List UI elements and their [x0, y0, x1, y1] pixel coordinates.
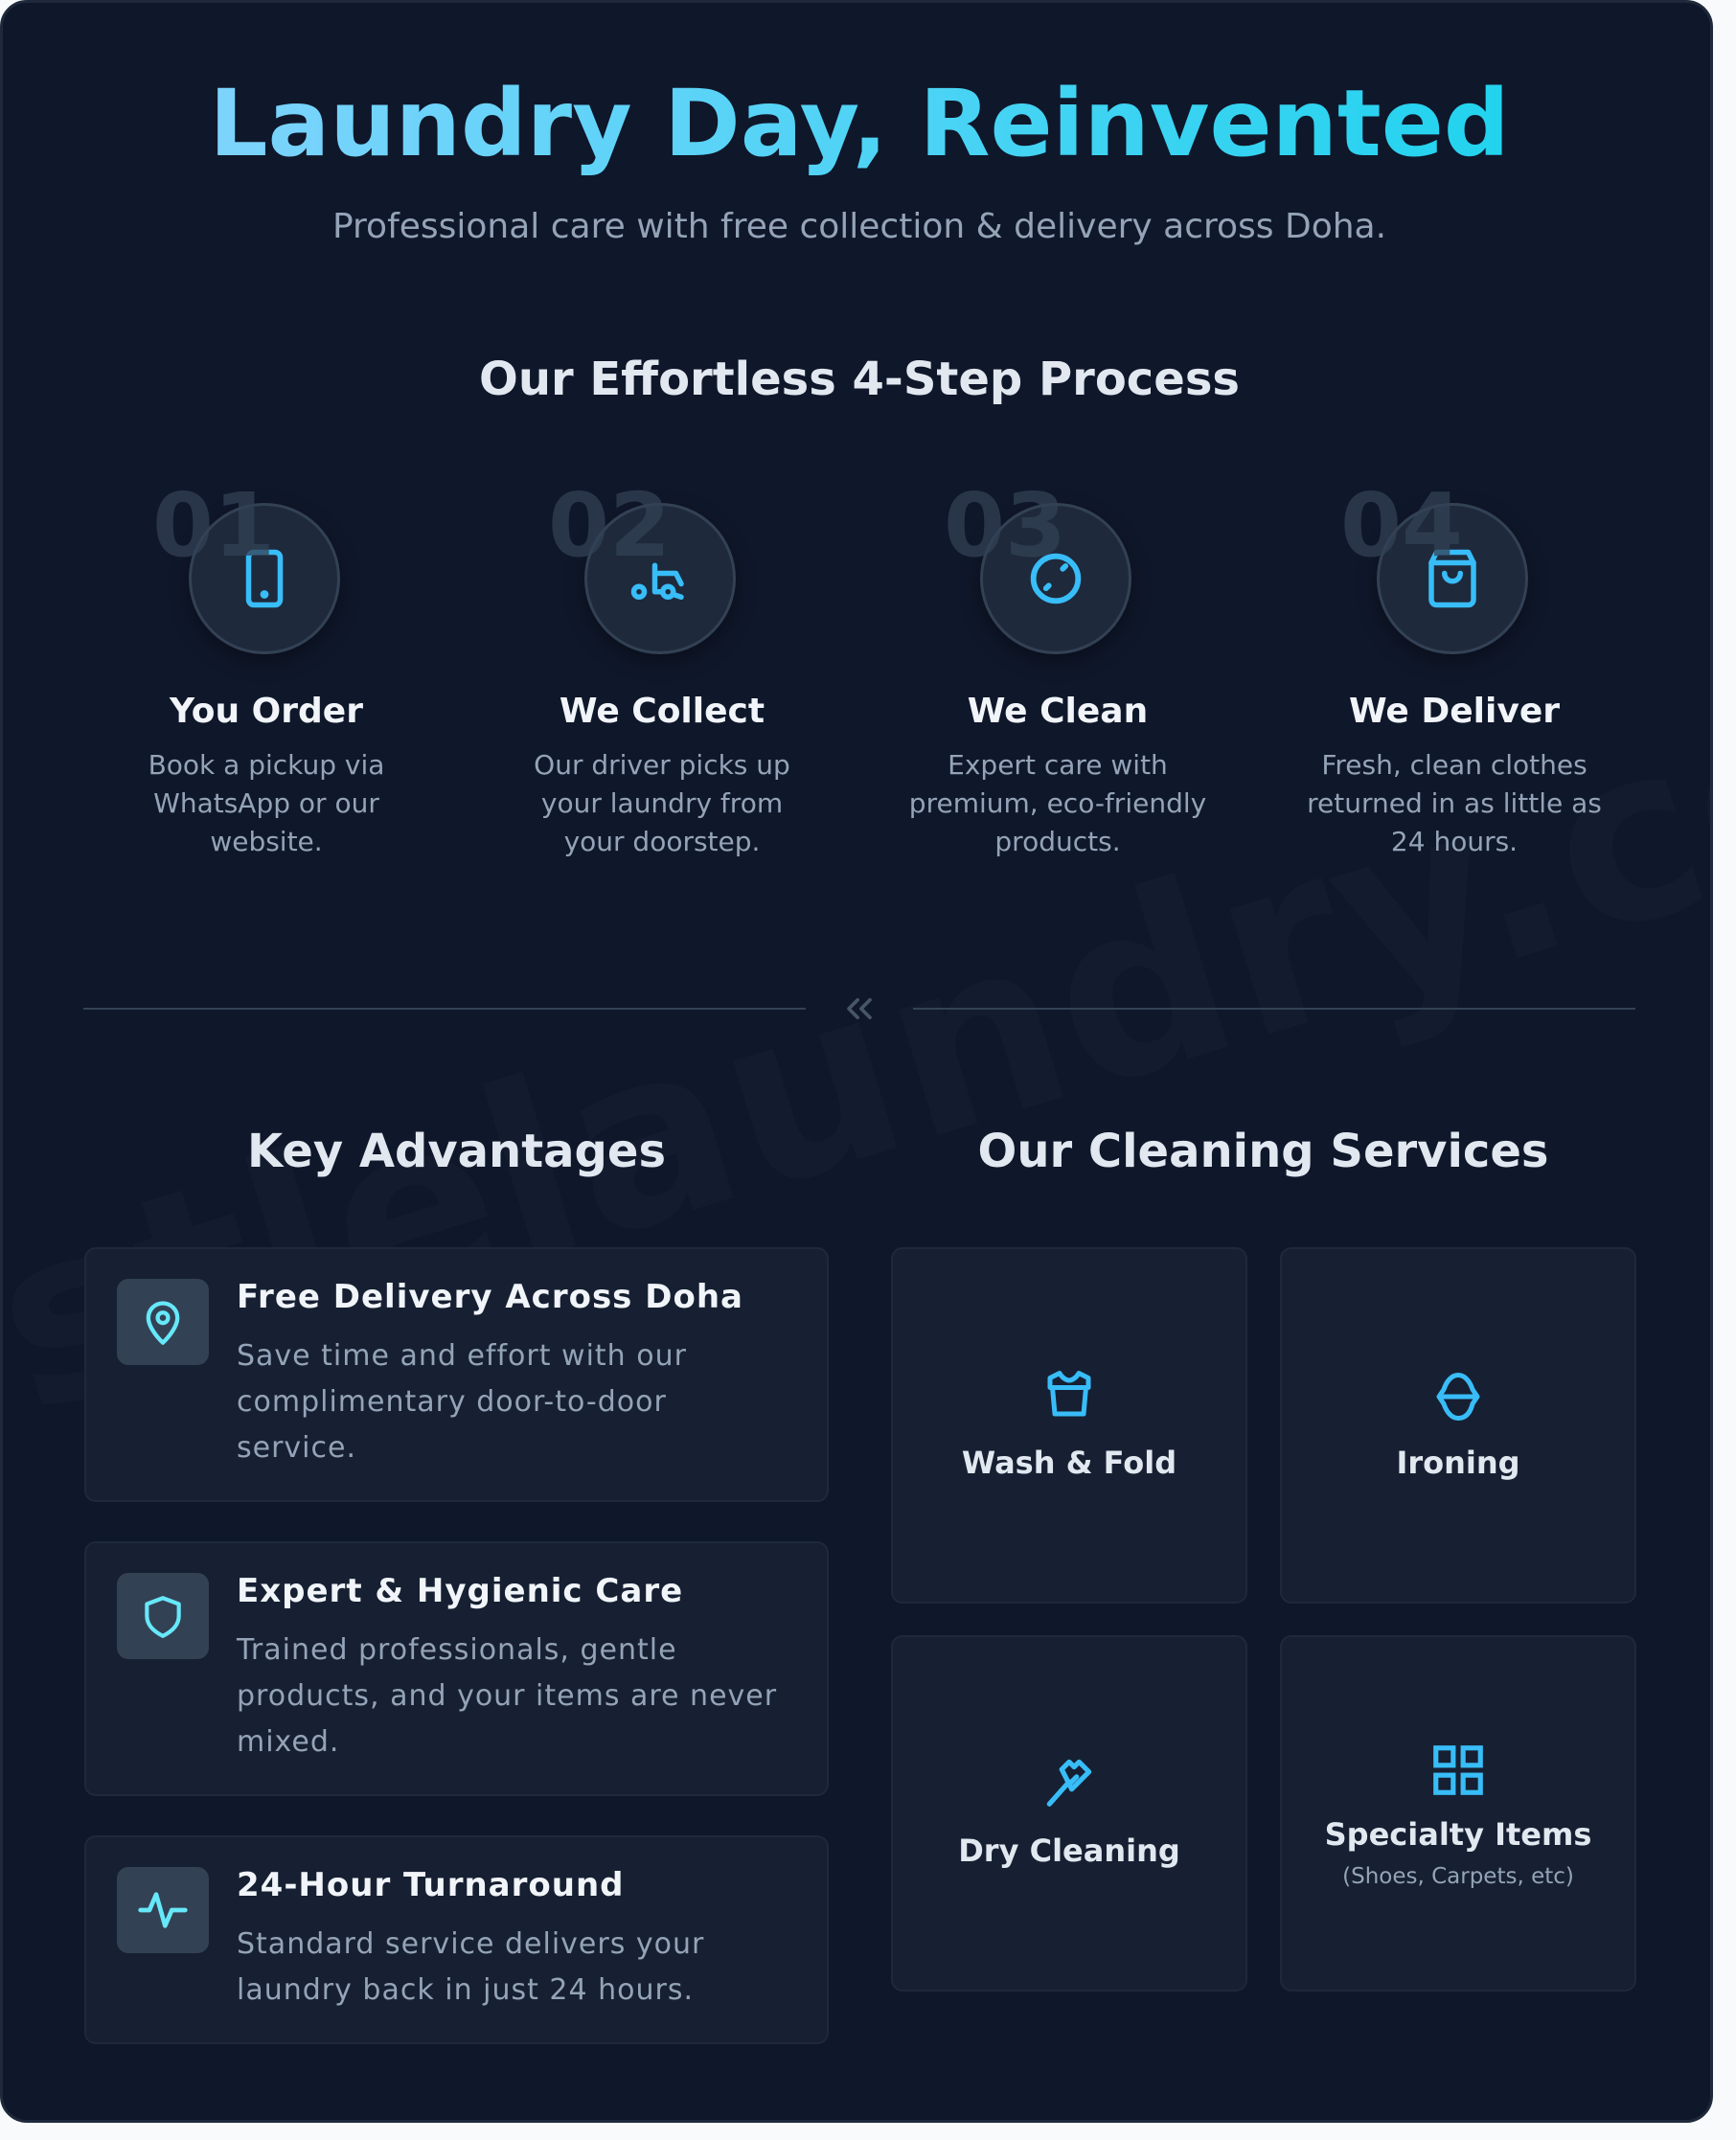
icon: phone [189, 503, 340, 654]
icon: iron [1437, 1373, 1479, 1421]
main panel: 01 [152, 474, 275, 577]
service: wash & fold: Wash & Fold [962, 1445, 1176, 1481]
service: dry cleaning: Dry Cleaning [958, 1833, 1180, 1869]
icon: brush [1046, 1759, 1092, 1807]
advantage 1: Save time and effort with our complimentary door-to-door service. [237, 1339, 687, 1465]
heading: process: Our Effortless 4-Step Process [479, 353, 1240, 406]
icon: grid [1433, 1745, 1483, 1795]
main panel: We Deliver [1349, 692, 1560, 731]
main panel: Book a pickup via WhatsApp or our website. [148, 749, 384, 857]
icon: shield [117, 1573, 209, 1659]
main panel: 02 [548, 474, 671, 577]
step 4 [1307, 474, 1602, 857]
heading: key advantages: Key Advantages [247, 1125, 666, 1178]
service: specialty items: (Shoes, Carpets, etc) [1342, 1864, 1574, 1889]
heading: services: Our Cleaning Services [978, 1125, 1548, 1178]
advantage 2: Trained professionals, gentle products, and your items are never mixed. [237, 1633, 777, 1759]
advantage 3: 24-Hour Turnaround [237, 1866, 625, 1904]
advantage 1: Free Delivery Across Doha [237, 1278, 743, 1316]
step 2 [534, 474, 790, 857]
icon: shirt [1048, 1371, 1090, 1416]
advantage 2: Expert & Hygienic Care [237, 1572, 683, 1610]
main panel: 04 [1340, 474, 1463, 577]
icon: cart [584, 503, 736, 654]
icon: pulse [117, 1867, 209, 1953]
main panel: We Clean [968, 692, 1148, 731]
service: specialty items [1280, 1635, 1636, 1992]
service: wash & fold [891, 1247, 1247, 1604]
icon: location pin [117, 1279, 209, 1365]
icon: bag [1377, 503, 1528, 654]
service: ironing: Ironing [1396, 1445, 1520, 1481]
main panel: Our driver picks up your laundry from your doorstep. [534, 749, 790, 857]
icon: washer drum [980, 503, 1131, 654]
advantage 3 [84, 1835, 829, 2044]
service: dry cleaning [891, 1635, 1247, 1992]
title: Laundry Day, Reinvented [209, 70, 1510, 177]
main panel: We Collect [560, 692, 765, 731]
service: specialty items: Specialty Items [1325, 1816, 1591, 1853]
main panel: 03 [944, 474, 1066, 577]
step 3 [909, 474, 1206, 857]
divider icon: chevrons [847, 998, 872, 1019]
main panel: You Order [170, 692, 363, 731]
main panel: Expert care with premium, eco-friendly products. [909, 749, 1206, 857]
main panel: Fresh, clean clothes returned in as little as 24 hours. [1307, 749, 1602, 857]
advantage 3: Standard service delivers your laundry back in just 24 hours. [237, 1927, 704, 2007]
subtitle: Professional care with free collection & delivery across Doha. [332, 207, 1386, 246]
service: ironing [1280, 1247, 1636, 1604]
advantage 1 [84, 1247, 829, 1502]
advantage 2 [84, 1541, 829, 1796]
step 1 [148, 474, 384, 857]
